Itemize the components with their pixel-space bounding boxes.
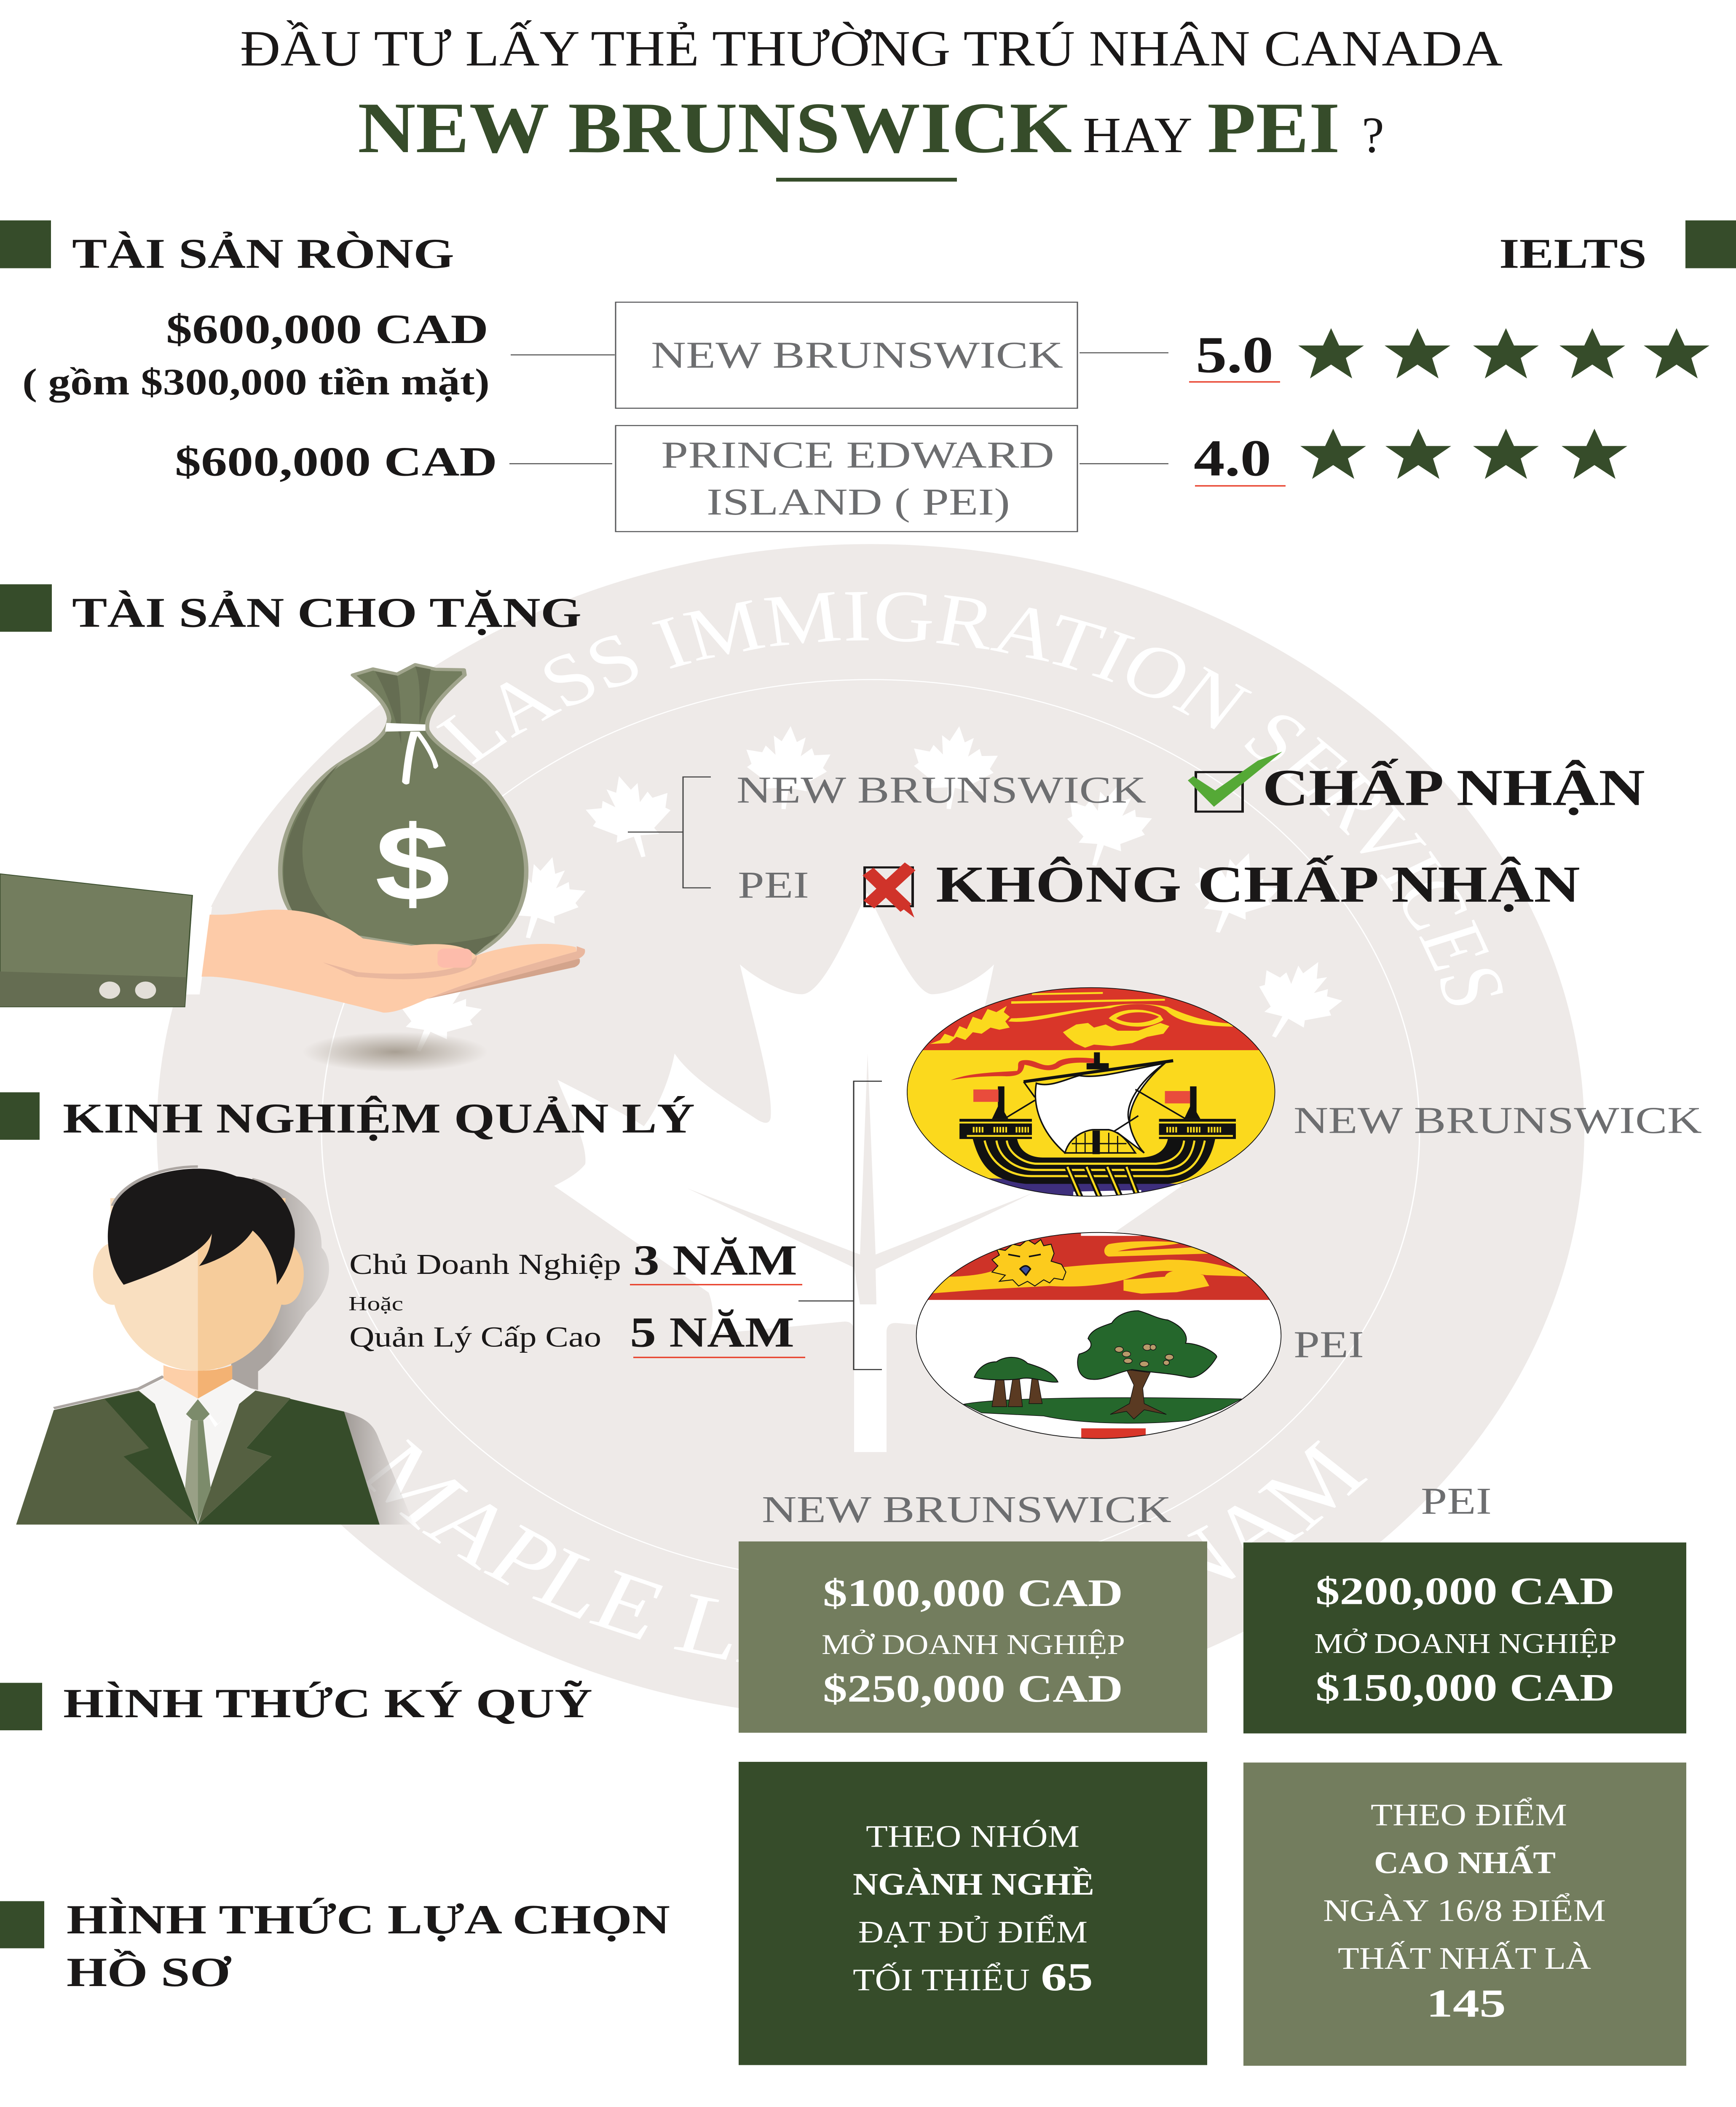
- panel: deposit PEI: $200,000 CAD: [1315, 1570, 1615, 1613]
- section marker: [0, 584, 52, 632]
- section marker: [0, 1901, 44, 1948]
- title line 2: ?: [1362, 107, 1384, 164]
- row: PEI not accepted: PEI: [738, 863, 809, 906]
- panel: selection New Brunswick: [739, 1762, 1207, 2065]
- experience text: 3 NĂM: [633, 1236, 797, 1284]
- bracket: gifted assets: [628, 777, 711, 888]
- net assets row: New Brunswick: $600,000 CAD: [166, 306, 488, 352]
- section marker: [0, 1683, 42, 1730]
- heading: IELTS: IELTS: [1499, 231, 1647, 277]
- watermark emblem: MAPLE LEAF VIETNAM: [339, 1423, 1387, 1691]
- panel: selection New Brunswick: NGÀNH NGHỀ: [853, 1866, 1094, 1901]
- box: New Brunswick: [616, 302, 1077, 408]
- heading: net assets: TÀI SẢN RÒNG: [72, 231, 454, 277]
- flag label: PEI: PEI: [1294, 1323, 1364, 1365]
- panel: selection New Brunswick: TỐI THIỂU: [853, 1962, 1030, 1997]
- experience text: [348, 1236, 805, 1358]
- panel: deposit PEI: [1243, 1542, 1686, 1733]
- panel: selection PEI: THEO ĐIỂM: [1371, 1797, 1567, 1832]
- title line 1: ĐẦU TƯ LẤY THẺ THƯỜNG TRÚ NHÂN CANADA: [240, 20, 1503, 77]
- title line 2: PEI: [1207, 88, 1340, 168]
- experience text: Chủ Doanh Nghiệp: [349, 1248, 621, 1280]
- watermark emblem: CLASS IMMIGRATION SERVICES: [375, 574, 1527, 1017]
- icon: businessman: [16, 1166, 414, 1525]
- heading: selection form: HÌNH THỨC LỰA CHỌN: [67, 1896, 670, 1943]
- panel: deposit New Brunswick: $250,000 CAD: [823, 1667, 1123, 1710]
- panel: selection New Brunswick: 65: [1041, 1954, 1093, 1999]
- row: New Brunswick accepted: [737, 752, 1645, 816]
- heading: management experience: KINH NGHIỆM QUẢN LÝ: [63, 1095, 695, 1142]
- five stars: [1298, 328, 1709, 378]
- net assets row: New Brunswick: ( gồm $300,000 tiền mặt): [22, 362, 490, 403]
- heading: selection form: [67, 1896, 670, 1995]
- section marker: [0, 1092, 40, 1140]
- heading: selection form: HỒ SƠ: [67, 1949, 232, 1995]
- flag label: New Brunswick: NEW BRUNSWICK: [1294, 1099, 1702, 1141]
- icon: hand holding money bag: $: [375, 804, 450, 923]
- title line 2: HAY: [1083, 107, 1192, 164]
- panel: selection PEI: NGÀY 16/8 ĐIỂM: [1323, 1893, 1606, 1928]
- experience text: 5 NĂM: [630, 1308, 794, 1356]
- row: New Brunswick accepted: CHẤP NHẬN: [1262, 759, 1645, 816]
- experience text: Quản Lý Cấp Cao: [349, 1321, 601, 1353]
- column label: PEI: PEI: [1421, 1480, 1492, 1522]
- box: Prince Edward Island: [616, 426, 1077, 532]
- panel: selection New Brunswick: ĐẠT ĐỦ ĐIỂM: [858, 1914, 1088, 1949]
- panel: deposit PEI: MỞ DOANH NGHIỆP: [1314, 1628, 1617, 1659]
- watermark emblem: [157, 544, 1584, 1718]
- row: PEI not accepted: [738, 855, 1580, 918]
- panel: selection PEI: CAO NHẤT: [1374, 1845, 1556, 1880]
- panel: selection PEI: THẤT NHẤT LÀ: [1338, 1941, 1591, 1976]
- box: Prince Edward Island: PRINCE EDWARD: [661, 434, 1054, 476]
- four stars: [1300, 429, 1627, 479]
- row: New Brunswick accepted: NEW BRUNSWICK: [737, 769, 1146, 811]
- flag: Prince Edward Island: [911, 1230, 1286, 1444]
- panel: selection PEI: [1243, 1763, 1686, 2066]
- panel: deposit New Brunswick: $100,000 CAD: [823, 1572, 1123, 1615]
- row: PEI not accepted: KHÔNG CHẤP NHẬN: [936, 855, 1580, 913]
- net assets row: PEI: $600,000 CAD: [175, 438, 497, 485]
- bracket: flags: [798, 1081, 882, 1370]
- section marker right: [1685, 220, 1736, 268]
- box: New Brunswick: NEW BRUNSWICK: [651, 334, 1063, 376]
- experience text: Hoặc: [348, 1293, 403, 1315]
- IELTS score 4.0: 4.0: [1194, 429, 1271, 487]
- title line 2: NEW BRUNSWICK: [358, 88, 1072, 168]
- heading: gifted assets: TÀI SẢN CHO TẶNG: [72, 590, 581, 636]
- section marker left: [0, 220, 51, 268]
- heading: deposit form: HÌNH THỨC KÝ QUỸ: [63, 1680, 592, 1726]
- panel: selection PEI: 145: [1426, 1981, 1506, 2025]
- box: Prince Edward Island: ISLAND ( PEI): [707, 480, 1010, 523]
- flag: New Brunswick: [902, 983, 1280, 1206]
- net assets row: New Brunswick: [22, 306, 490, 403]
- column label: New Brunswick: NEW BRUNSWICK: [762, 1488, 1171, 1531]
- IELTS score 5.0: 5.0: [1196, 326, 1273, 383]
- panel: deposit New Brunswick: [739, 1541, 1207, 1733]
- panel: deposit PEI: $150,000 CAD: [1315, 1667, 1615, 1709]
- panel: selection New Brunswick: THEO NHÓM: [866, 1819, 1080, 1854]
- icon: hand holding money bag: [0, 665, 585, 1072]
- panel: deposit New Brunswick: MỞ DOANH NGHIỆP: [822, 1629, 1125, 1660]
